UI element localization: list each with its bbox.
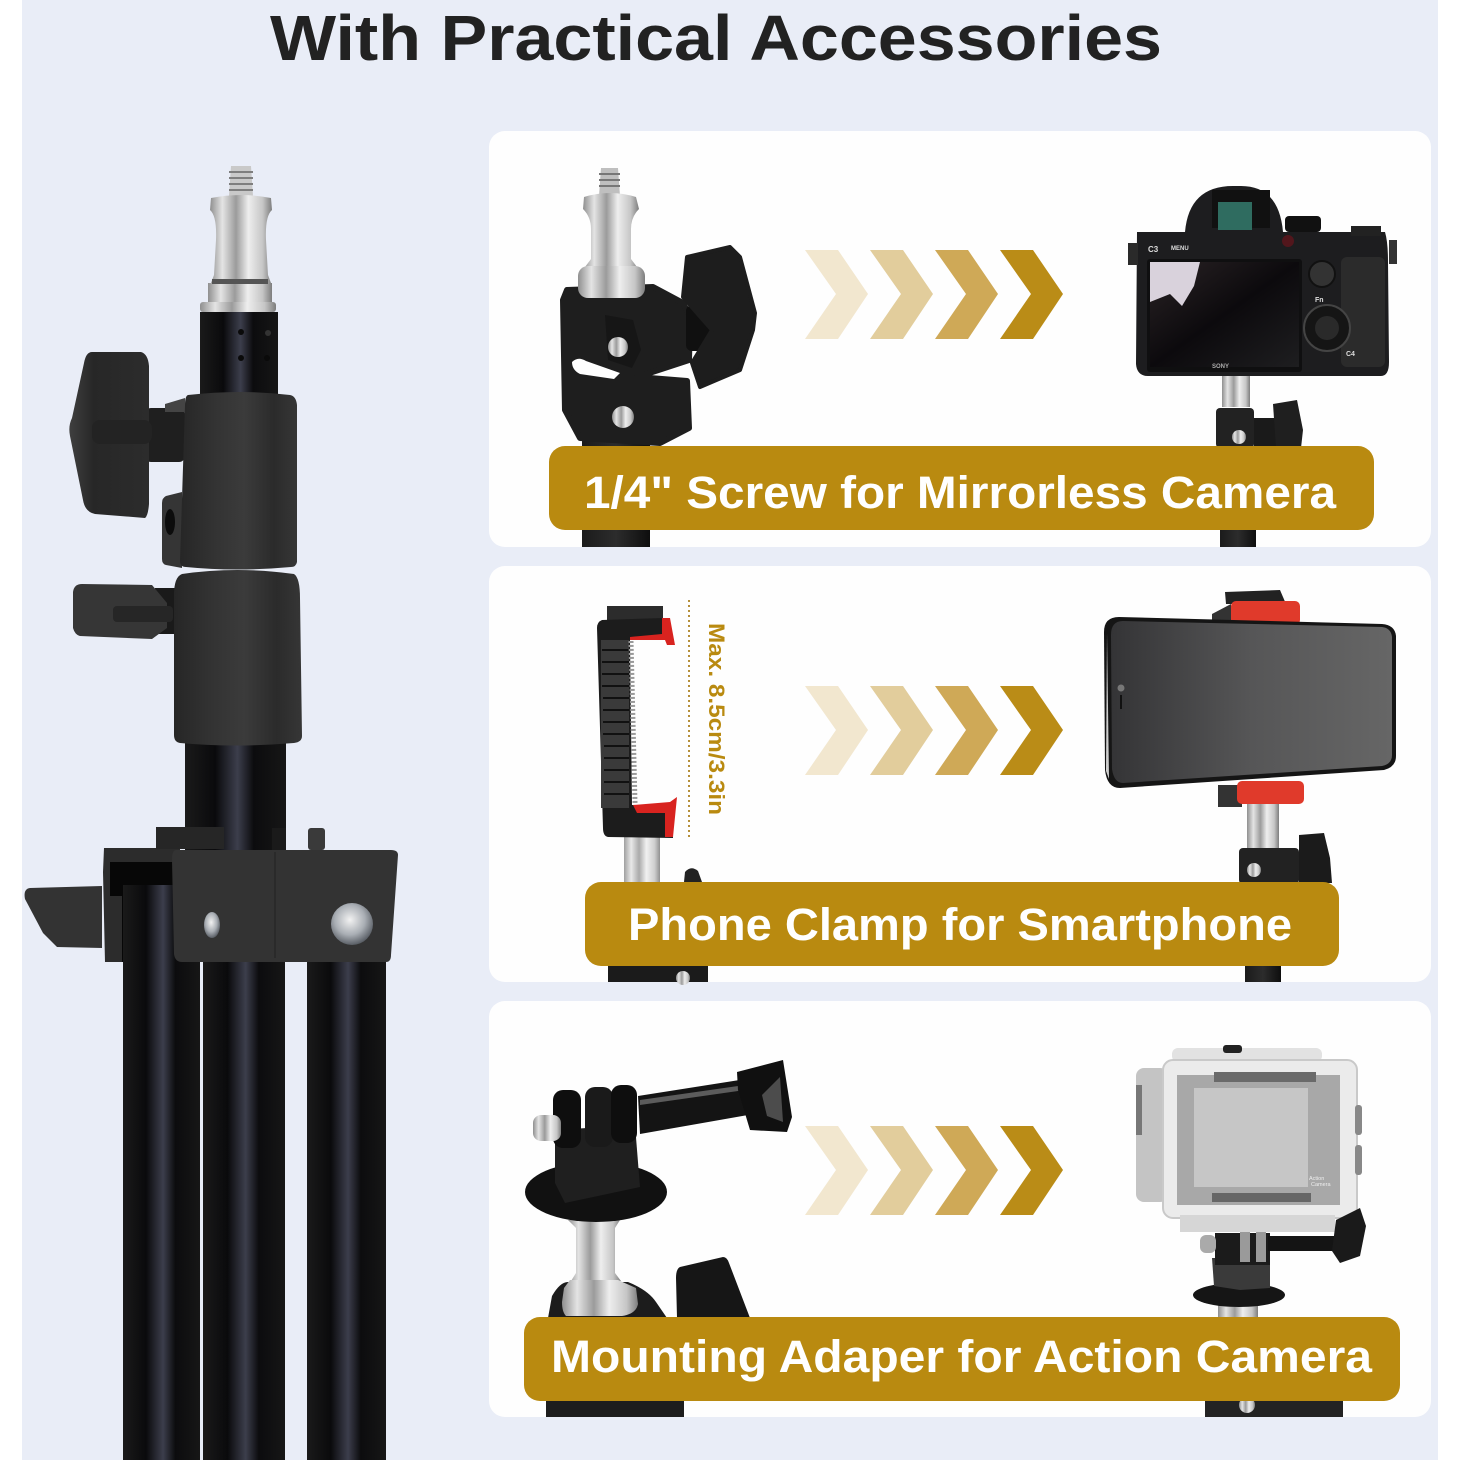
chevron arrows xyxy=(805,1126,1063,1215)
upper black tube with holes xyxy=(200,312,278,396)
clamp body xyxy=(563,287,690,443)
small screw xyxy=(204,912,220,938)
mirrorless camera: Fn xyxy=(1315,297,1324,304)
lower collar xyxy=(174,570,302,746)
top spigot xyxy=(200,166,276,312)
title: With Practical Accessories xyxy=(270,2,1162,74)
label bar: 1/4" Screw for Mirrorless Camera xyxy=(584,467,1337,518)
panel: action camera xyxy=(489,1001,1431,1417)
label bar xyxy=(549,446,1374,530)
label bar: Mounting Adaper for Action Camera xyxy=(551,1331,1373,1382)
spigot xyxy=(578,168,645,298)
mirrorless camera xyxy=(1128,186,1397,448)
mirrorless camera: C3 xyxy=(1148,245,1159,254)
chevron arrows xyxy=(805,686,1063,775)
hub front plate xyxy=(172,850,398,962)
panel: smartphone xyxy=(489,566,1431,985)
size dotted line xyxy=(688,600,690,838)
label bar: Phone Clamp for Smartphone xyxy=(628,899,1292,950)
clamp knob xyxy=(683,247,755,387)
smartphone on clamp xyxy=(1104,590,1396,884)
label bar xyxy=(524,1317,1400,1401)
label bar xyxy=(585,882,1339,966)
mirrorless camera: MENU xyxy=(1171,246,1189,252)
light stand photo xyxy=(25,166,398,1460)
tube left xyxy=(582,430,650,547)
hub top tabs xyxy=(156,827,325,852)
mirrorless camera: SONY xyxy=(1212,364,1229,370)
clamps below label xyxy=(546,1395,1343,1417)
size text: Max. 8.5cm/3.3in xyxy=(704,623,729,815)
action camera in case: Camera xyxy=(1311,1182,1332,1188)
upper lock knob xyxy=(69,352,185,518)
upper collar xyxy=(180,392,297,570)
chevron arrows xyxy=(805,250,1063,339)
side lever xyxy=(25,886,102,948)
action camera in case xyxy=(1136,1045,1366,1318)
stand legs xyxy=(123,885,386,1460)
hub left bracket xyxy=(103,848,180,962)
action camera in case: Action xyxy=(1309,1176,1324,1182)
mirrorless camera: C4 xyxy=(1346,351,1355,358)
panel: mirrorless camera xyxy=(489,131,1431,547)
collar bracket xyxy=(162,492,182,568)
hub plate seam xyxy=(274,852,276,958)
stand upper tube xyxy=(185,740,286,855)
tube right xyxy=(1220,515,1256,547)
phone clamp xyxy=(597,606,702,884)
tubes below label xyxy=(608,960,1281,985)
rivet xyxy=(331,903,373,945)
lower lock knob xyxy=(73,584,175,639)
mounting adapter xyxy=(525,1060,792,1318)
